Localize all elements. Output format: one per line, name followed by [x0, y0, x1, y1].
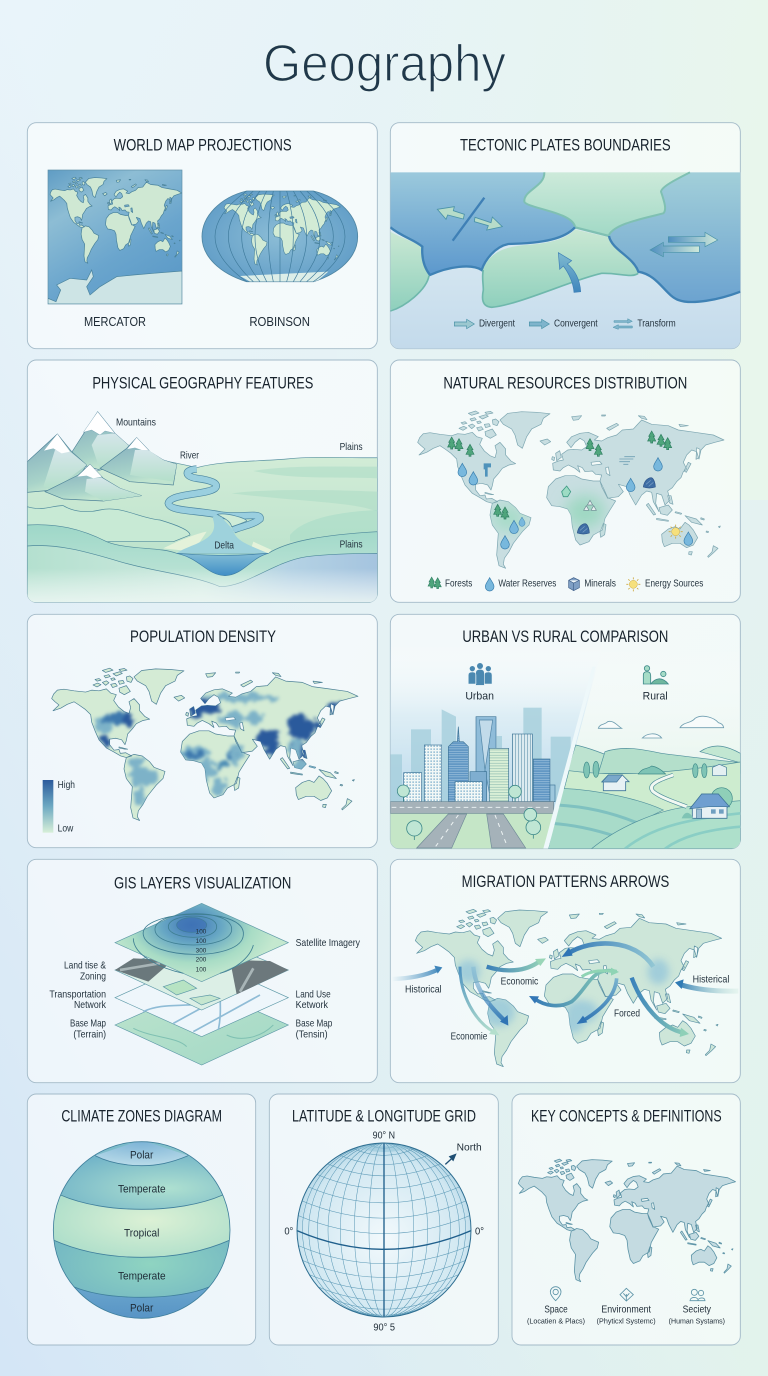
legend: Water Reserves [498, 579, 556, 590]
plates diagram [390, 172, 740, 349]
globe with climate bands [53, 1140, 230, 1323]
label: forced: Forced [614, 1008, 640, 1019]
concept: environment: (Phyticxl Systemc) [597, 1316, 656, 1325]
labels: right column: Ketwork [296, 1000, 328, 1011]
icon: transform arrows [650, 232, 718, 257]
legend: Transform [637, 319, 676, 330]
heading: TECTONIC PLATES BOUNDARIES [460, 136, 671, 155]
concept: environment: Environment [601, 1305, 651, 1316]
arrow: north [445, 1153, 457, 1164]
legend: density scale: Low [58, 823, 73, 834]
legend [454, 319, 676, 330]
panel: key concepts and definitions [512, 1094, 740, 1345]
panel: population density [27, 614, 377, 848]
heading: CLIMATE ZONES DIAGRAM [61, 1106, 222, 1125]
world map [518, 1159, 736, 1282]
legend [428, 577, 703, 591]
heading: URBAN VS RURAL COMPARISON [462, 627, 668, 646]
concept: society: (Human Systams) [669, 1316, 725, 1325]
panel: climate zones diagram [27, 1094, 256, 1345]
label: 0 east: 0° [475, 1226, 484, 1237]
layer: topographic contours [115, 903, 288, 982]
heading: GIS LAYERS VISUALIZATION [114, 873, 291, 892]
legend: Minerals [584, 579, 616, 590]
map: Mercator [48, 170, 182, 304]
legend: density scale [43, 780, 75, 834]
label: 90 north: 90° N [373, 1131, 395, 1142]
labels: left column: Network [74, 1000, 106, 1011]
heading: MIGRATION PATTERNS ARROWS [462, 872, 669, 891]
heading: NATURAL RESOURCES DISTRIBUTION [443, 373, 687, 392]
label: historical right: Histerical [693, 974, 729, 985]
label: 90 south: 90° 5 [373, 1323, 395, 1334]
panel: world map projections [27, 123, 377, 349]
label: economie: Economie [451, 1031, 487, 1042]
labels: right column [296, 938, 360, 1040]
arrows [392, 943, 738, 1037]
labels: right column: Satellite Imagery [296, 938, 360, 949]
label: polar south: Polar [130, 1302, 154, 1314]
heading: WORLD MAP PROJECTIONS [114, 136, 292, 155]
heading: PHYSICAL GEOGRAPHY FEATURES [92, 373, 313, 392]
gridded globe [297, 1143, 471, 1319]
density world map [52, 668, 358, 821]
label: river: River [180, 450, 200, 461]
migration world map [415, 909, 722, 1067]
panel: GIS layers visualization [27, 859, 377, 1083]
legend: density scale: High [58, 780, 75, 791]
label: historical left: Historical [405, 984, 442, 995]
icon: rural person and field [643, 666, 668, 684]
legend: Convergent [554, 319, 598, 330]
icon: transform fault with opposing arrows [437, 198, 502, 241]
label: delta: Delta [214, 541, 235, 552]
concept: space [527, 1287, 585, 1325]
concept: society [669, 1289, 725, 1325]
legend: Forests [445, 579, 472, 590]
map: Robinson [202, 191, 358, 282]
labels: left column: Base Map [70, 1019, 106, 1030]
label: Robinson: ROBINSON [249, 314, 310, 329]
concept: society: Seciety [683, 1305, 711, 1316]
label: urban: Urban [465, 690, 494, 702]
labels: left column [49, 960, 106, 1040]
panel: physical geography features [27, 360, 377, 602]
label: plains upper: Plains [340, 442, 363, 453]
panel: migration patterns arrows [390, 859, 740, 1083]
layer: topographic contours: 100 [196, 939, 207, 945]
panel: natural resources distribution [390, 360, 740, 602]
label: tropical: Tropical [124, 1228, 159, 1240]
legend: Energy Sources [645, 579, 703, 590]
label: polar north: Polar [130, 1149, 154, 1161]
resources world map [418, 411, 724, 568]
layer: base terrain [115, 987, 288, 1065]
labels: left column: Land tise & [64, 960, 106, 971]
label: rural: Rural [643, 690, 668, 702]
labels: left column: Zoning [80, 971, 106, 982]
heading: LATITUDE & LONGITUDE GRID [292, 1106, 476, 1125]
icon: convergent curved arrow [558, 253, 581, 292]
labels: right column: Base Map [296, 1019, 332, 1030]
concept: space: (Locatien & Placs) [527, 1316, 585, 1325]
layer: satellite imagery and land use [115, 952, 288, 1010]
label: 0 west: 0° [284, 1226, 293, 1237]
layer: transportation network [115, 958, 288, 1037]
legend: Divergent [479, 319, 515, 330]
panel: latitude and longitude grid [269, 1094, 498, 1345]
label: north: North [457, 1142, 482, 1153]
panel: urban vs rural comparison [390, 614, 740, 849]
layer: topographic contours: 300 [196, 948, 207, 954]
labels: left column: (Terrain) [73, 1029, 106, 1040]
heading: POPULATION DENSITY [130, 627, 276, 646]
layer: topographic contours: 200 [196, 958, 207, 964]
urban vs rural illustration [390, 643, 740, 849]
label: mountains: Mountains [116, 417, 156, 428]
panel: tectonic plates boundaries [390, 123, 740, 349]
label: plains lower: Plains [340, 539, 363, 550]
landscape illustration [27, 412, 377, 602]
concept: environment [597, 1288, 656, 1325]
layer: topographic contours: 100 [196, 930, 207, 936]
labels: right column: Land Use [296, 989, 331, 1000]
icon: urban people [468, 663, 492, 685]
concept: space: Space [544, 1305, 568, 1316]
label: temperate south: Temperate [118, 1270, 166, 1282]
label: temperate north: Temperate [118, 1183, 166, 1195]
labels: right column: (Tensin) [296, 1029, 328, 1040]
layer: topographic contours: 100 [196, 967, 207, 973]
label: Mercator: MERCATOR [84, 314, 146, 329]
labels: left column: Transportation [49, 989, 106, 1000]
title: Geography [263, 35, 506, 93]
label: economic: Economic [501, 976, 538, 987]
